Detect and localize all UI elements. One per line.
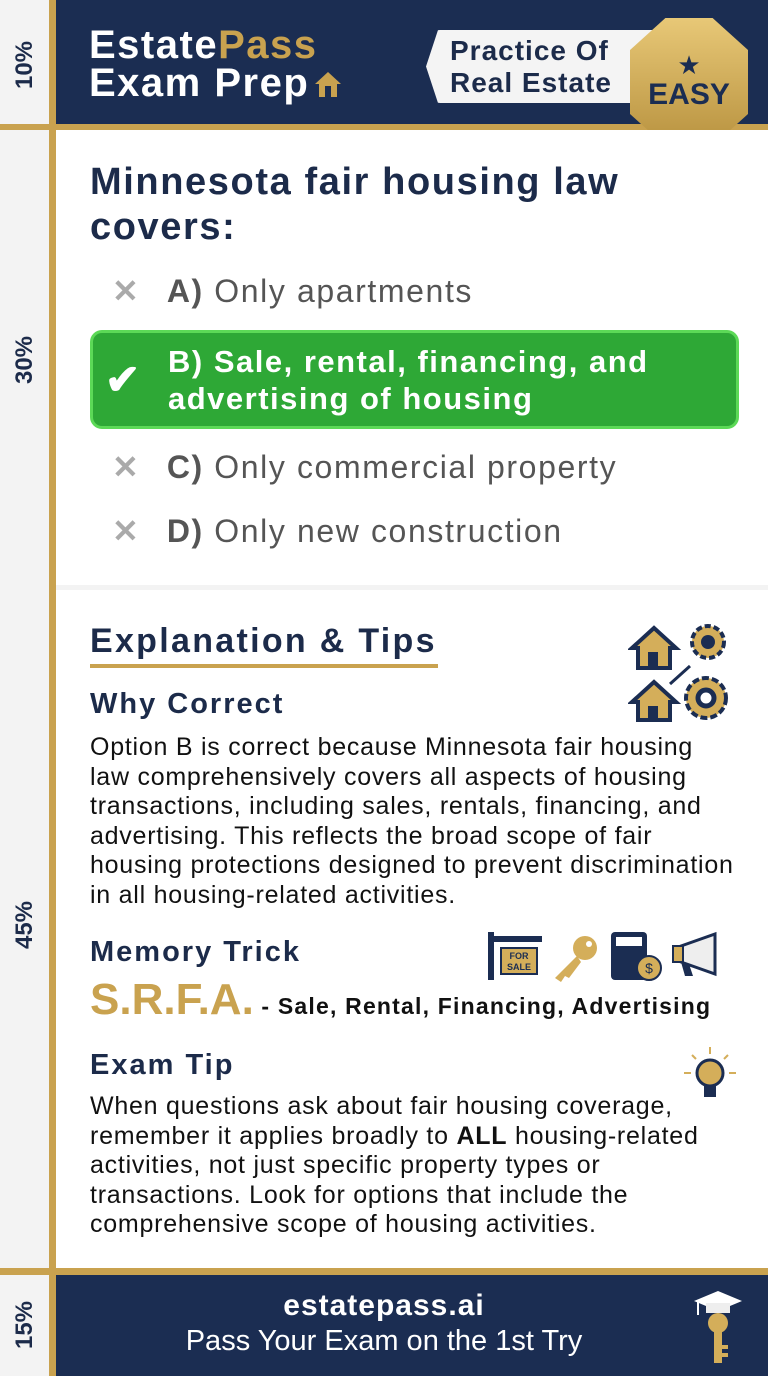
icons: sale sign, key, calculator, megaphone: SALE	[507, 962, 531, 972]
panel: question	[56, 130, 768, 585]
why correct: housing protections designed to prevent discrimination	[90, 851, 734, 879]
heading underline	[90, 664, 438, 668]
option B correct: advertising of housing	[168, 381, 533, 416]
icon: houses and gears	[628, 624, 728, 722]
question heading: Minnesota fair housing law	[90, 161, 619, 203]
why correct: in all housing-related activities.	[90, 881, 456, 909]
why correct: Why Correct	[90, 688, 284, 720]
footer	[56, 1275, 768, 1376]
icons: sale sign, key, calculator, megaphone: $	[645, 960, 653, 976]
brand title: Exam Prep	[89, 61, 309, 105]
question heading	[90, 161, 619, 248]
question heading: covers:	[90, 206, 236, 248]
category tag: Practice Of	[450, 35, 609, 66]
icon: light bulb	[684, 1047, 736, 1097]
label: 30%: 30%	[11, 336, 38, 384]
why correct: transactions, including sales, rentals, financing, and	[90, 792, 702, 820]
exam tip: transactions. Look for options that include the	[90, 1181, 628, 1209]
header	[56, 0, 768, 124]
exam tip: remember it applies broadly to ALL housing-related	[90, 1122, 699, 1150]
option A: ✕ A) Only apartments	[112, 273, 473, 309]
footer tagline: Pass Your Exam on the 1st Try	[186, 1325, 582, 1357]
exam tip: When questions ask about fair housing coverage,	[90, 1092, 673, 1120]
label: 45%: 45%	[11, 901, 38, 949]
brand title	[89, 23, 341, 105]
category tag: Real Estate	[450, 67, 612, 98]
badge: EASY	[630, 18, 748, 130]
exam tip: Exam Tip	[90, 1049, 234, 1081]
badge: EASY: EASY	[648, 78, 730, 111]
panel: explanation	[56, 590, 768, 1268]
option B correct: B) Sale, rental, financing, and	[168, 344, 649, 379]
why correct: advertising. This reflects the broad scope of fair	[90, 822, 652, 850]
exam tip: activities, not just specific property types or	[90, 1151, 600, 1179]
option D: ✕ D) Only new construction	[112, 513, 563, 549]
why correct: law comprehensively covers all aspects of housing	[90, 763, 687, 791]
label: 15%: 15%	[11, 1301, 38, 1349]
exam tip: comprehensive scope of housing activities.	[90, 1210, 597, 1238]
icons: sale sign, key, calculator, megaphone	[488, 932, 716, 982]
explanation heading: Explanation & Tips	[90, 622, 437, 660]
footer site: estatepass.ai	[283, 1289, 485, 1322]
icon: grad cap key	[694, 1291, 742, 1363]
option B correct	[90, 330, 739, 429]
gold footer rule	[0, 1268, 768, 1275]
exam tip	[90, 1049, 699, 1238]
gold header rule	[0, 124, 768, 130]
memory trick heading: Memory Trick	[90, 936, 301, 968]
icons: sale sign, key, calculator, megaphone: FOR	[510, 951, 529, 961]
option B correct: ✔	[105, 356, 140, 403]
badge: EASY: ★	[677, 50, 701, 80]
brand title: EstatePass	[89, 23, 317, 67]
mnemonic S.R.F.A.: S.R.F.A. - Sale, Rental, Financing, Advertising	[90, 975, 711, 1024]
option C: ✕ C) Only commercial property	[112, 449, 617, 485]
label: 10%: 10%	[11, 41, 38, 89]
why correct: Option B is correct because Minnesota fair housing	[90, 733, 693, 761]
category tag	[426, 30, 652, 103]
gold vertical rail	[49, 0, 56, 1376]
why correct	[90, 688, 734, 909]
